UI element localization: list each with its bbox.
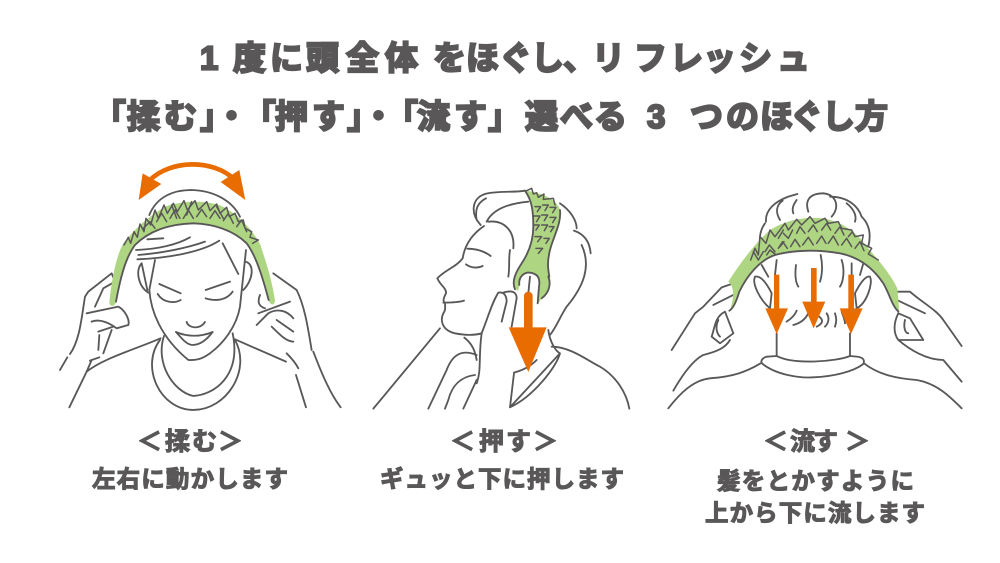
headband <box>728 218 899 312</box>
headband teeth <box>751 217 878 260</box>
illustration: knead, head front view <box>60 164 341 410</box>
caption: press: ギュッと下に押します <box>380 466 624 492</box>
hand and arm <box>512 273 539 327</box>
title: 「揉む」・「押す」・「流す」選べる3つのほぐし方 <box>93 98 888 135</box>
caption: flow: ＜流す＞ <box>763 428 870 456</box>
caption: knead: ＜揉む＞ <box>137 428 243 456</box>
collar and shoulders <box>60 333 341 410</box>
caption: flow <box>705 428 925 526</box>
caption: press: ＜押す＞ <box>450 428 558 456</box>
hair lines <box>760 193 870 287</box>
collar and shoulder <box>510 330 629 409</box>
head and hair lines <box>437 191 591 335</box>
caption: press <box>380 428 624 492</box>
arrow down <box>509 296 547 372</box>
headband teeth <box>527 188 556 253</box>
caption: knead <box>92 428 288 492</box>
illustration: flow, back of head <box>668 193 962 408</box>
title <box>93 40 888 135</box>
hair and head lines <box>136 190 252 360</box>
collar and shoulders <box>668 356 962 408</box>
caption: flow: 髪をとかすように <box>717 468 914 494</box>
ears and neck <box>754 276 871 356</box>
hands <box>672 283 962 391</box>
headband teeth <box>124 201 258 245</box>
illustration: press, side profile <box>373 188 629 409</box>
caption: flow: 上から下に流します <box>705 500 925 526</box>
three arrows down <box>765 268 863 334</box>
double arrow <box>139 164 245 200</box>
headband <box>514 191 560 303</box>
headband <box>109 202 275 306</box>
title: 1度に頭全体をほぐし、リフレッシュ <box>200 40 810 76</box>
caption: knead: 左右に動かします <box>92 466 288 492</box>
hands <box>70 273 312 372</box>
